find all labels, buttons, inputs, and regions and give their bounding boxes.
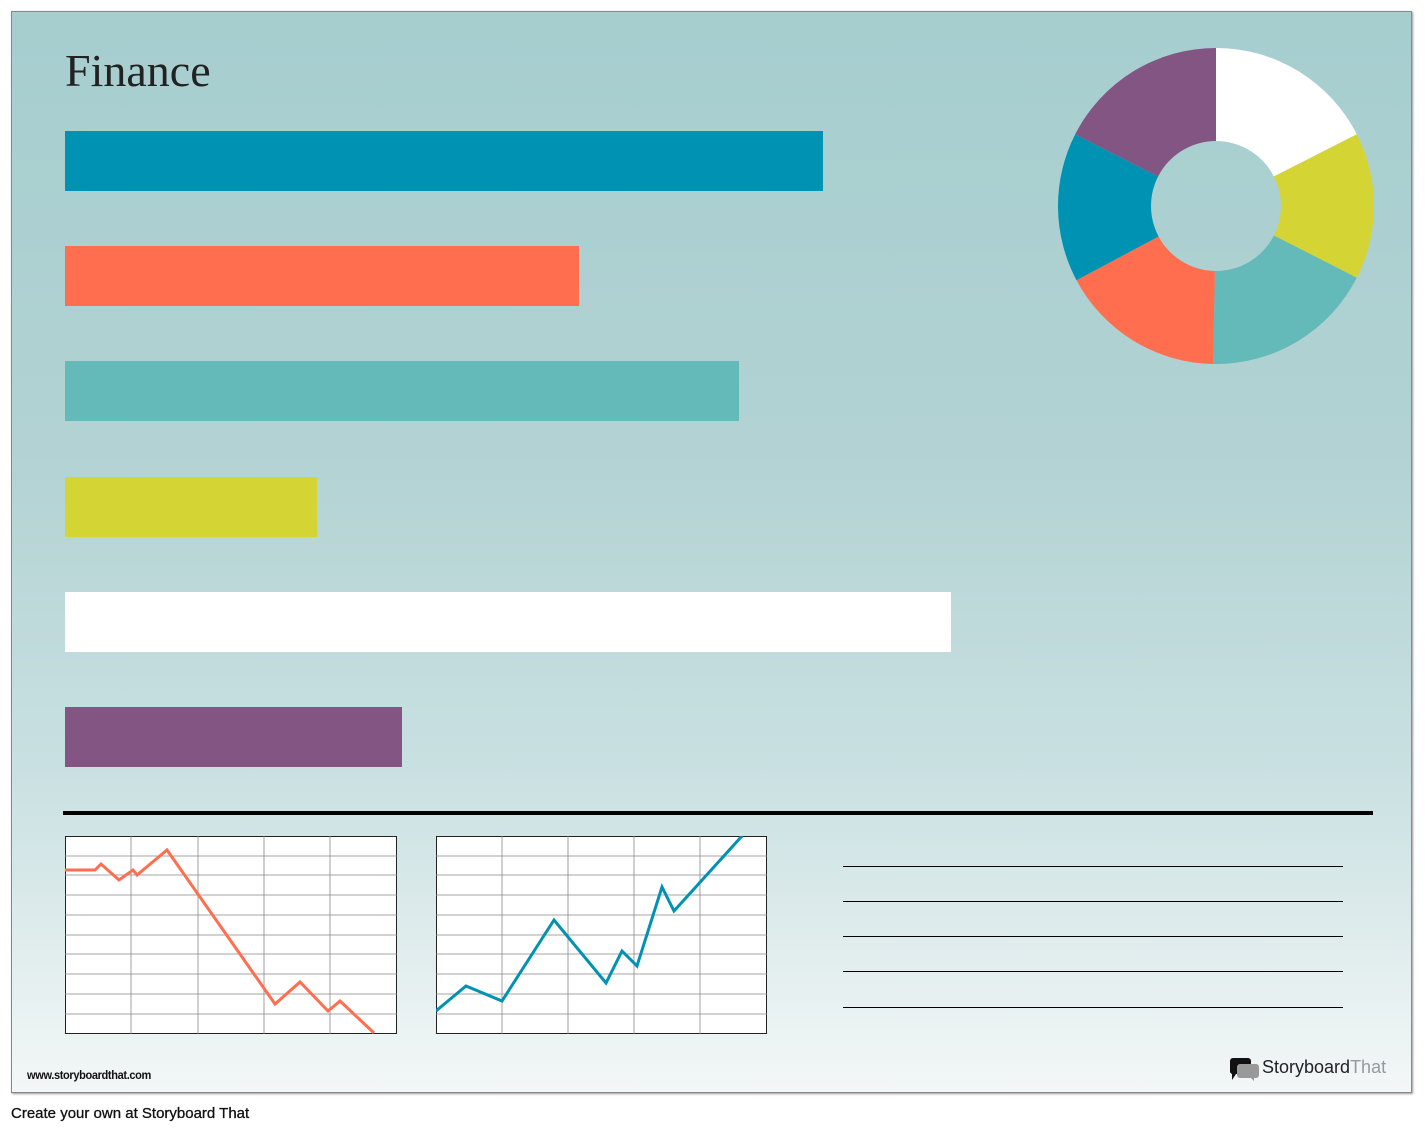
logo: StoryboardThat xyxy=(1262,1057,1386,1077)
line chart: rising xyxy=(436,836,767,1034)
icon: speech bubbles xyxy=(1230,1058,1259,1081)
bar chart xyxy=(65,131,951,767)
bar: purple xyxy=(65,707,402,767)
bar: orange xyxy=(65,246,579,306)
footer url: www.storyboardthat.com xyxy=(27,1068,151,1082)
bottom caption: Create your own at Storyboard That xyxy=(11,1105,249,1122)
writing lines xyxy=(843,866,1343,1008)
bar: blue xyxy=(65,131,823,191)
bar: yellow xyxy=(65,477,317,537)
bar: teal xyxy=(65,361,739,421)
title: Finance xyxy=(65,45,211,96)
logo xyxy=(1230,1057,1386,1081)
line chart: declining xyxy=(65,836,397,1034)
bar: white xyxy=(65,592,951,652)
donut chart xyxy=(1058,48,1374,364)
divider line xyxy=(63,811,1373,815)
